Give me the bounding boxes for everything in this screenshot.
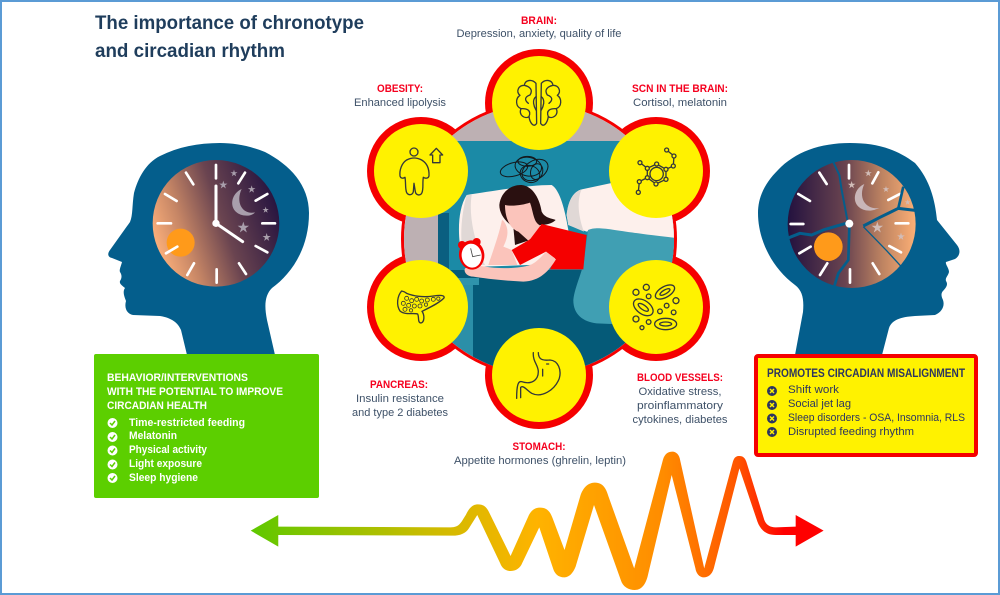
red panel heading: PROMOTES CIRCADIAN MISALIGNMENT [767,366,966,380]
green panel heading [107,372,283,412]
green panel list: Melatonin [129,430,177,442]
blanket [573,228,680,324]
circle: brain [492,56,586,150]
green panel list [108,417,245,484]
bedroom illustration [404,112,674,366]
label: blood vessels: Oxidative stress, [638,386,722,398]
label: pancreas [352,379,448,419]
red panel list: Social jet lag [788,398,851,410]
clock face: left [153,160,279,287]
label: obesity: Enhanced lipolysis [354,97,446,109]
green panel heading: BEHAVIOR/INTERVENTIONS [107,372,248,384]
label: brain [456,15,622,40]
red panel list: Shift work [788,384,840,396]
label: brain: BRAIN: [521,15,557,27]
green panel heading: CIRCADIAN HEALTH [107,400,207,412]
label: blood vessels: BLOOD VESSELS: [637,372,723,384]
label: blood vessels: proinflammatory [637,400,724,412]
clock face: right, cracked [787,160,917,289]
red panel list: Sleep disorders - OSA, Insomnia, RLS [788,412,965,424]
label: stomach: STOMACH: [512,441,566,453]
green panel list: Light exposure [129,458,202,470]
green panel: interventions [94,354,319,498]
central bedroom scene with organ circles [367,49,710,429]
green panel list: Time-restricted feeding [129,417,245,429]
label: obesity: OBESITY: [377,83,423,95]
title: The importance of chronotype [95,13,364,34]
wave arrow [251,452,824,590]
label: blood vessels: cytokines, diabetes [632,414,728,426]
left head with clock [108,143,309,355]
circle: blood vessels [609,260,703,354]
label: SCN in the brain: SCN IN THE BRAIN: [632,83,728,95]
label: obesity [354,83,446,109]
label: SCN in the brain: Cortisol, melatonin [633,97,727,109]
circle: pancreas [374,260,468,354]
worry scribble [500,156,548,184]
green panel list: Sleep hygiene [129,472,198,484]
label: pancreas: PANCREAS: [370,379,428,391]
label: stomach [454,441,626,467]
alarm clock [458,238,484,270]
title: and circadian rhythm [95,41,285,62]
title [95,13,364,62]
circle: stomach [492,328,586,422]
right head with broken clock [758,143,959,355]
red panel: misalignment [756,356,976,455]
circle: obesity [374,124,468,218]
green panel heading: WITH THE POTENTIAL TO IMPROVE [107,386,283,398]
green panel list: Physical activity [129,444,208,456]
label: brain: Depression, anxiety, quality of life [456,28,622,40]
pillows [459,183,680,267]
label: pancreas: Insulin resistance [356,393,444,405]
label: blood vessels [632,372,728,426]
label: SCN in the brain [632,83,728,109]
woman [457,155,587,282]
label: pancreas: and type 2 diabetes [352,407,448,419]
label: stomach: Appetite hormones (ghrelin, leptin) [454,455,626,467]
red panel list: Disrupted feeding rhythm [788,426,914,438]
red panel list [767,384,965,438]
circle: SCN molecule [609,124,703,218]
